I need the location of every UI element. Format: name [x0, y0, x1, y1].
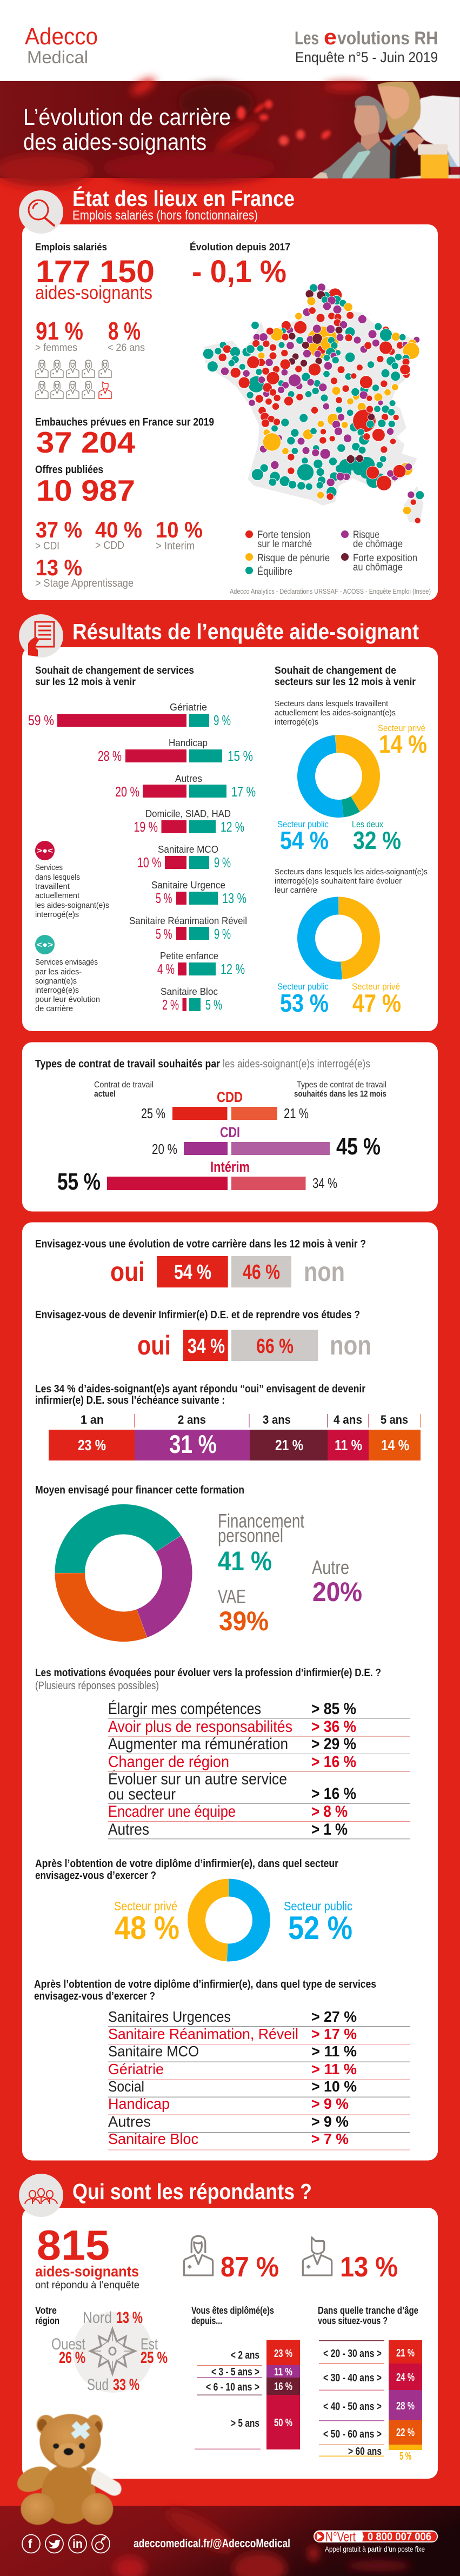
chart heading: contrats — [35, 1058, 370, 1070]
legend: services actuels: actuellement — [35, 891, 80, 900]
legend: services actuels: dans lesquels — [35, 873, 80, 882]
stat: 815 répondants — [35, 2221, 139, 2291]
list: type de services: Sanitaires Urgences — [108, 2008, 231, 2025]
stacked bar: tranche d'âge: 24 % — [396, 2372, 415, 2384]
bar chart: contrats: Intérim — [210, 1159, 250, 1175]
bar chart: contrats: 55 % — [57, 1169, 101, 1195]
stat: emplois salariés — [35, 242, 155, 303]
compass: votre région: région — [35, 2315, 59, 2326]
stacked bar: échéance: Les 34 % d’aides-soignant(e)s ayant répondu “oui” envisagent de devenir — [35, 1383, 365, 1395]
column captions — [94, 1080, 386, 1099]
stat: évolution depuis 2017: Évolution depuis 2017 — [190, 241, 290, 253]
legend: services envisagés: pour leur évolution — [35, 995, 100, 1004]
icon: magnifier — [19, 190, 63, 234]
chart heading: secteurs: Souhait de changement de — [275, 665, 396, 676]
header logo: Adecco Medical: Adecco — [25, 23, 98, 50]
donut chart: secteur après diplôme — [35, 1858, 352, 1954]
donut chart: secteurs actuels: 54 % — [280, 826, 329, 854]
bar chart: services: 12 % — [221, 961, 245, 977]
bar chart: services: 5 % — [156, 890, 172, 906]
bar chart: contrats: 34 % — [312, 1175, 337, 1191]
stat: évolution depuis 2017: - 0,1 % — [192, 254, 286, 289]
icon: group of people — [19, 2174, 63, 2217]
stat: femmes et moins de 26 ans: > femmes — [35, 342, 77, 354]
header: survey name and issue: Enquête n°5 - Juin 2019 — [295, 49, 438, 65]
list: type de services: > 10 % — [311, 2078, 357, 2095]
list: motivations: > 29 % — [311, 1735, 356, 1753]
stacked bar: ancienneté du diplôme: 50 % — [274, 2417, 292, 2429]
bar chart: services — [28, 702, 256, 1013]
stacked bar: tranche d'âge: vous situez-vous ? — [318, 2315, 388, 2326]
list: motivations: ou secteur — [108, 1785, 176, 1803]
chart heading: secteurs — [275, 665, 416, 688]
list: type de services — [34, 1979, 410, 2150]
header: survey name and issue: e — [324, 25, 337, 49]
heading: répondants: Qui sont les répondants ? — [72, 2179, 312, 2204]
question: reprendre les études: 66 % — [256, 1335, 294, 1358]
compass: votre région: 26 % — [59, 2349, 85, 2367]
donut chart: financement — [35, 1484, 362, 1647]
legend: services actuels: interrogé(e)s — [35, 910, 79, 919]
donut chart: financement: Moyen envisagé pour financer cette formation — [35, 1484, 244, 1496]
stats: contract types: > CDD — [95, 540, 124, 552]
donut chart: secteurs actuels: Secteur public — [277, 819, 329, 829]
icon: people pictogram — [36, 360, 111, 399]
bar chart: contrats: 20 % — [152, 1141, 177, 1157]
list: motivations: Changer de région — [108, 1753, 229, 1771]
list: motivations: Évoluer sur un autre service — [108, 1770, 287, 1788]
bar chart: services: Petite enfance — [160, 951, 218, 961]
stacked bar: tranche d'âge — [318, 2305, 422, 2462]
subheading: Emplois salariés (hors fonctionnaires) — [72, 208, 258, 223]
donut chart: secteur après diplôme: envisagez-vous d’exercer ? — [35, 1870, 156, 1882]
stacked bar: ancienneté du diplôme: < 6 - 10 ans > — [206, 2381, 259, 2393]
stat: embauches: 37 204 — [36, 426, 135, 459]
source note: Adecco Analytics - Déclarations URSSAF - ACOSS - Enquête Emploi (Insee) — [230, 588, 431, 595]
stats: contract types: > CDI — [35, 540, 59, 552]
stacked bar: ancienneté du diplôme: 16 % — [274, 2381, 292, 2393]
header logo: Adecco Medical: Medical — [27, 48, 88, 67]
list: type de services: Autres — [108, 2113, 151, 2130]
donut chart: secteurs actuels: 32 % — [353, 826, 401, 854]
chart heading: services: sur les 12 mois à venir — [35, 676, 136, 688]
bar chart: contrats: CDD — [217, 1089, 243, 1105]
bar chart: services: 9 % — [214, 712, 231, 728]
compass: votre région: 25 % — [141, 2349, 168, 2367]
stacked bar: tranche d'âge: Dans quelle tranche d’âge — [318, 2305, 418, 2316]
bar chart: services: 19 % — [134, 819, 158, 835]
bar chart: services: Sanitaire MCO — [158, 844, 218, 855]
stats: contract types: 10 % — [156, 517, 203, 542]
compass: votre région: Nord — [83, 2309, 112, 2327]
bar chart: contrats — [57, 1089, 381, 1195]
bar chart: services: 9 % — [214, 854, 231, 871]
legend: services actuels: Services — [35, 863, 63, 872]
donut chart: secteurs actuels: 14 % — [379, 730, 427, 758]
list: motivations: > 36 % — [311, 1718, 356, 1736]
question: évolution de carrière: oui — [110, 1257, 145, 1287]
compass: votre région: 13 % — [116, 2309, 143, 2327]
banner with title and photo — [0, 75, 460, 187]
stat: hommes 13 % — [303, 2238, 398, 2283]
donut chart: financement: Financement — [218, 1510, 304, 1532]
bar chart: services: 13 % — [222, 890, 246, 906]
map legend: Forte exposition — [353, 553, 417, 564]
list: type de services: > 17 % — [311, 2026, 357, 2042]
list: motivations: Les motivations évoquées pour évoluer vers la profession d’infirmier(e) D.E. ? — [35, 1667, 381, 1679]
stacked bar: tranche d'âge: > 60 ans — [348, 2446, 382, 2458]
stats: contract types: 13 % — [36, 555, 82, 580]
donut chart: financement: 20% — [312, 1577, 362, 1607]
donut chart: secteurs actuels: Secteurs dans lesquels travaillent — [275, 699, 389, 708]
stat: offres publiées: Offres publiées — [35, 464, 103, 476]
map legend: de chômage — [353, 539, 403, 550]
stacked bar: échéance: 31 % — [169, 1430, 217, 1458]
bar chart: services: 59 % — [28, 712, 54, 728]
list: motivations: Avoir plus de responsabilités — [108, 1718, 292, 1736]
list: motivations: > 16 % — [311, 1753, 356, 1771]
question: reprendre les études: 34 % — [188, 1335, 225, 1358]
footer band — [0, 2502, 460, 2576]
stat: femmes et moins de 26 ans: 91 % — [36, 317, 83, 345]
question: reprendre les études: Envisagez-vous de devenir Infirmier(e) D.E. et de reprendre vos études ? — [35, 1309, 360, 1321]
stacked bar: ancienneté du diplôme: depuis... — [191, 2315, 222, 2326]
list: motivations: > 1 % — [311, 1821, 348, 1838]
stat: femmes 87 %: 87 % — [221, 2252, 279, 2283]
column captions: actuel — [94, 1090, 116, 1099]
bar chart: services: 15 % — [228, 748, 253, 764]
stacked bar: échéance: infirmier(e) D.E. sous l’échéance suivante : — [35, 1395, 225, 1406]
chart heading: services: Souhait de changement de services — [35, 665, 194, 676]
donut chart: secteurs souhaités: 53 % — [280, 989, 329, 1017]
panel: résultats de l'enquête — [19, 614, 438, 1031]
bar chart: contrats: 45 % — [336, 1133, 381, 1160]
bar chart: services: 20 % — [115, 784, 139, 800]
donut chart: financement: 41 % — [218, 1546, 272, 1576]
bar chart: services: Sanitaire Urgence — [151, 880, 225, 891]
map legend: au chômage — [353, 562, 403, 573]
donut chart: secteur après diplôme: Après l’obtention de votre diplôme d’infirmier(e), dans quel secteur — [35, 1858, 338, 1870]
compass: votre région: Ouest — [51, 2335, 86, 2353]
stat: hommes 13 %: 13 % — [340, 2252, 398, 2283]
legend: services envisagés: interrogé(e)s — [35, 986, 79, 995]
stacked bar: ancienneté du diplôme: 23 % — [274, 2348, 292, 2360]
list: motivations: > 8 % — [311, 1803, 348, 1821]
donut chart: secteurs actuels: actuellement les aides-soignant(e)s — [275, 708, 396, 718]
list: motivations — [35, 1667, 410, 1840]
stacked bar: tranche d'âge: < 40 - 50 ans > — [323, 2401, 382, 2413]
stat: 815 répondants: ont répondu à l’enquête — [35, 2280, 139, 2291]
list: type de services: envisagez-vous d’exercer ? — [34, 1990, 155, 2002]
bar chart: contrats: CDI — [220, 1124, 240, 1140]
heading: état des lieux: État des lieux en France — [72, 186, 295, 211]
stat: femmes 87 % — [184, 2236, 279, 2283]
donut chart: secteurs souhaités: Secteur public — [277, 981, 329, 992]
stacked bar: échéance: 3 ans — [263, 1413, 291, 1426]
stacked bar: échéance: 11 % — [335, 1437, 362, 1453]
column captions: Types de contrat de travail — [297, 1080, 386, 1090]
map legend — [245, 529, 417, 577]
legend: services envisagés — [35, 935, 100, 1013]
question: évolution de carrière: Envisagez-vous une évolution de votre carrière dans les 12 mois à venir ? — [35, 1238, 366, 1250]
stat: femmes et moins de 26 ans: < 26 ans — [108, 342, 145, 354]
legend: services actuels: travaillent — [35, 882, 70, 891]
stat: emplois salariés: aides-soignants — [35, 282, 152, 303]
header: survey name and issue: volutions RH — [337, 28, 438, 49]
list: type de services: Sanitaire Bloc — [108, 2130, 198, 2147]
legend: services envisagés: soignant(e)s — [35, 977, 77, 986]
donut chart: secteur après diplôme: 48 % — [115, 1910, 179, 1946]
stacked bar: ancienneté du diplôme: < 3 - 5 ans > — [211, 2366, 259, 2378]
callout: numéro vert: 0 800 007 006 — [368, 2531, 431, 2543]
bar chart: services: 2 % — [162, 997, 179, 1013]
stacked bar: ancienneté du diplôme: Vous êtes diplômé(e)s — [191, 2305, 274, 2316]
stacked bar: ancienneté du diplôme: 11 % — [274, 2366, 292, 2378]
column captions: Contrat de travail — [94, 1080, 154, 1090]
banner with title and photo: des aides-soignants — [23, 129, 206, 155]
stats: contract types — [35, 517, 203, 589]
stat: 815 répondants: 815 — [37, 2221, 110, 2269]
stacked bar: tranche d'âge: < 30 - 40 ans > — [323, 2372, 382, 2384]
legend: services envisagés: Services envisagés — [35, 958, 98, 967]
stat: embauches — [35, 416, 214, 459]
icon: document in hand — [19, 614, 63, 658]
donut chart: secteur après diplôme: 52 % — [288, 1910, 352, 1946]
donut chart: financement: personnel — [218, 1524, 283, 1546]
map legend: Équilibre — [257, 566, 292, 577]
bar chart: services: Domicile, SIAD, HAD — [145, 808, 231, 819]
stacked bar: échéance: 5 ans — [381, 1413, 408, 1426]
question: reprendre les études: non — [330, 1330, 371, 1360]
header logo: Adecco Medical — [25, 23, 98, 67]
donut chart: secteurs actuels: Secteur privé — [378, 723, 425, 733]
stat: femmes et moins de 26 ans — [35, 317, 145, 354]
stacked bar: échéance: 2 ans — [178, 1413, 206, 1426]
stats: contract types: 37 % — [36, 517, 82, 542]
stacked bar: ancienneté du diplôme — [191, 2305, 300, 2449]
heading: résultats: Résultats de l’enquête aide-soignant — [72, 619, 419, 644]
stacked bar: tranche d'âge: < 50 - 60 ans > — [323, 2428, 382, 2440]
list: motivations: > 16 % — [311, 1785, 356, 1803]
stacked bar: ancienneté du diplôme: > 5 ans — [231, 2418, 259, 2429]
legend: services envisagés: de carrière — [35, 1004, 73, 1013]
donut chart: secteurs souhaités: Secteur privé — [352, 981, 400, 992]
stat: offres publiées: 10 987 — [36, 474, 135, 507]
list: motivations: Encadrer une équipe — [108, 1803, 236, 1821]
stacked bar: tranche d'âge: 21 % — [396, 2347, 415, 2359]
question: reprendre les études — [35, 1309, 371, 1361]
list: type de services: > 11 % — [311, 2043, 357, 2060]
map legend: sur le marché — [257, 539, 312, 550]
stats: contract types: > Stage Apprentissage — [35, 577, 134, 589]
callout: numéro vert: N°Vert — [325, 2529, 356, 2545]
stacked bar: tranche d'âge: 22 % — [396, 2427, 415, 2439]
panel: qui sont les répondants — [19, 2174, 438, 2479]
stacked bar: échéance: 14 % — [381, 1437, 409, 1453]
list: motivations: (Plusieurs réponses possibles) — [35, 1680, 159, 1692]
column captions: souhaités dans les 12 mois — [294, 1090, 386, 1099]
donut chart: secteurs souhaités: leur carrière — [275, 886, 317, 895]
legend: services actuels — [35, 841, 109, 919]
list: type de services: Gériatrie — [108, 2061, 164, 2077]
list: type de services: Sanitaire MCO — [108, 2043, 199, 2060]
panel: évolution de carrière — [22, 1222, 438, 2161]
compass: votre région — [35, 2305, 168, 2394]
callout: numéro vert: Appel gratuit à partir d’un poste fixe — [325, 2545, 425, 2553]
stacked bar: échéance — [35, 1383, 421, 1460]
question: reprendre les études: oui — [137, 1330, 171, 1360]
social icon labels — [28, 2537, 83, 2551]
panel: état des lieux en France — [19, 186, 438, 600]
bar chart: services: Sanitaire Réanimation Réveil — [129, 915, 247, 926]
compass: votre région: Votre — [35, 2305, 57, 2316]
stat: femmes et moins de 26 ans: 8 % — [108, 317, 141, 345]
donut chart: secteurs souhaités: 47 % — [352, 989, 401, 1017]
social icon labels: f — [28, 2537, 32, 2551]
header: survey name and issue — [295, 25, 438, 65]
bar chart: services: 10 % — [137, 854, 161, 871]
donut chart: secteurs souhaités: interrogé(e)s souhaitent faire évoluer — [275, 877, 402, 886]
chart heading: secteurs: secteurs sur les 12 mois à venir — [275, 676, 416, 688]
donut chart: secteurs actuels: interrogé(e)s — [275, 718, 318, 727]
map legend: Risque — [353, 529, 379, 541]
list: type de services: > 9 % — [311, 2113, 349, 2130]
bar chart: services: Handicap — [169, 738, 208, 748]
list: type de services: Social — [108, 2078, 144, 2095]
stats: contract types: > Interim — [156, 540, 195, 552]
donut chart: secteur après diplôme: Secteur privé — [114, 1899, 177, 1913]
stacked bar: ancienneté du diplôme: < 2 ans — [231, 2349, 259, 2361]
callout: numéro vert — [314, 2529, 438, 2553]
list: type de services: > 9 % — [311, 2095, 349, 2112]
donut chart: financement: 39% — [219, 1606, 269, 1636]
legend: services envisagés: <●> — [37, 940, 53, 950]
bar chart: services: 5 % — [205, 997, 222, 1013]
legend: services envisagés: par les aides- — [35, 967, 82, 977]
bar chart: services: Autres — [175, 773, 202, 784]
donut chart: secteurs actuels — [275, 699, 427, 854]
social icon labels: in — [72, 2537, 83, 2551]
bar chart: services: 12 % — [221, 819, 244, 835]
footer website: adeccomedical.fr/@AdeccoMedical — [134, 2537, 290, 2550]
legend: services actuels: les aides-soignant(e)s — [35, 901, 109, 910]
list: type de services: Handicap — [108, 2095, 170, 2112]
chart heading: contrats: les aides-soignant(e)s interrogé(e)s — [223, 1058, 370, 1070]
donut chart: secteur après diplôme: Secteur public — [284, 1899, 352, 1913]
stacked bar: tranche d'âge: < 20 - 30 ans > — [323, 2348, 382, 2360]
question: évolution de carrière: 46 % — [243, 1261, 280, 1284]
social media icons — [22, 2535, 110, 2553]
donut chart: financement: Autre — [312, 1556, 349, 1578]
stacked bar: échéance: 21 % — [275, 1437, 303, 1453]
list: type de services: > 27 % — [311, 2008, 357, 2025]
stats: contract types: 40 % — [95, 517, 142, 542]
bar chart: contrats: 21 % — [284, 1105, 309, 1121]
list: motivations: Autres — [108, 1821, 149, 1838]
list: type de services: > 11 % — [311, 2061, 357, 2077]
question: évolution de carrière — [35, 1238, 366, 1287]
list: type de services: Après l’obtention de votre diplôme d’infirmier(e), dans quel type de services — [34, 1979, 376, 1990]
header: survey name and issue: Les — [295, 28, 319, 49]
question: évolution de carrière: 54 % — [174, 1261, 211, 1284]
donut chart: secteurs souhaités — [275, 867, 428, 1017]
question: évolution de carrière: non — [304, 1257, 345, 1287]
list: type de services: Sanitaire Réanimation, Réveil — [108, 2026, 298, 2042]
stacked bar: échéance: 4 ans — [334, 1413, 362, 1426]
bar chart: services: 17 % — [231, 784, 256, 800]
stat: emplois salariés: Emplois salariés — [35, 242, 107, 253]
bar chart: services: Gériatrie — [170, 702, 207, 713]
compass: votre région: 33 % — [113, 2376, 139, 2394]
chart heading: contrats: Types de contrat de travail souhaités par — [35, 1058, 220, 1070]
bar chart: services: 9 % — [214, 926, 231, 942]
compass: votre région: Sud — [87, 2376, 109, 2394]
illustration: injured teddy bear — [13, 2414, 122, 2525]
stacked bar: échéance: 1 an — [81, 1413, 104, 1426]
bar chart: contrats: 25 % — [141, 1105, 165, 1121]
map of France with dots — [203, 283, 424, 523]
map legend: Forte tension — [257, 529, 310, 541]
chart heading: services — [35, 665, 194, 688]
stat: emplois salariés: 177 150 — [36, 254, 155, 289]
donut chart: financement: VAE — [218, 1585, 246, 1608]
donut chart: secteurs souhaités: Secteurs dans lesquels les aides-soignant(e)s — [275, 867, 428, 877]
list: motivations: Augmenter ma rémunération — [108, 1735, 288, 1753]
list: motivations: Élargir mes compétences — [108, 1700, 261, 1718]
stat: 815 répondants: aides-soignants — [35, 2263, 139, 2280]
bar chart: services: Sanitaire Bloc — [161, 986, 218, 997]
bar chart: services: 4 % — [157, 961, 175, 977]
stat: embauches: Embauches prévues en France sur 2019 — [35, 416, 214, 428]
map legend: Risque de pénurie — [257, 553, 330, 564]
legend: services actuels: >●< — [37, 846, 53, 855]
panel: types de contrat — [22, 1043, 438, 1211]
donut chart: secteurs actuels: Les deux — [352, 819, 383, 829]
bar chart: services: 5 % — [156, 926, 172, 942]
banner with title and photo: L’évolution de carrière — [23, 104, 231, 130]
stacked bar: tranche d'âge: 28 % — [396, 2400, 415, 2412]
bar chart: services: 28 % — [98, 748, 122, 764]
list: type de services: > 7 % — [311, 2130, 349, 2147]
stacked bar: échéance: 23 % — [78, 1437, 106, 1453]
compass: votre région: Est — [141, 2335, 158, 2353]
stacked bar: tranche d'âge: 5 % — [399, 2451, 411, 2462]
list: motivations: > 85 % — [311, 1700, 356, 1718]
